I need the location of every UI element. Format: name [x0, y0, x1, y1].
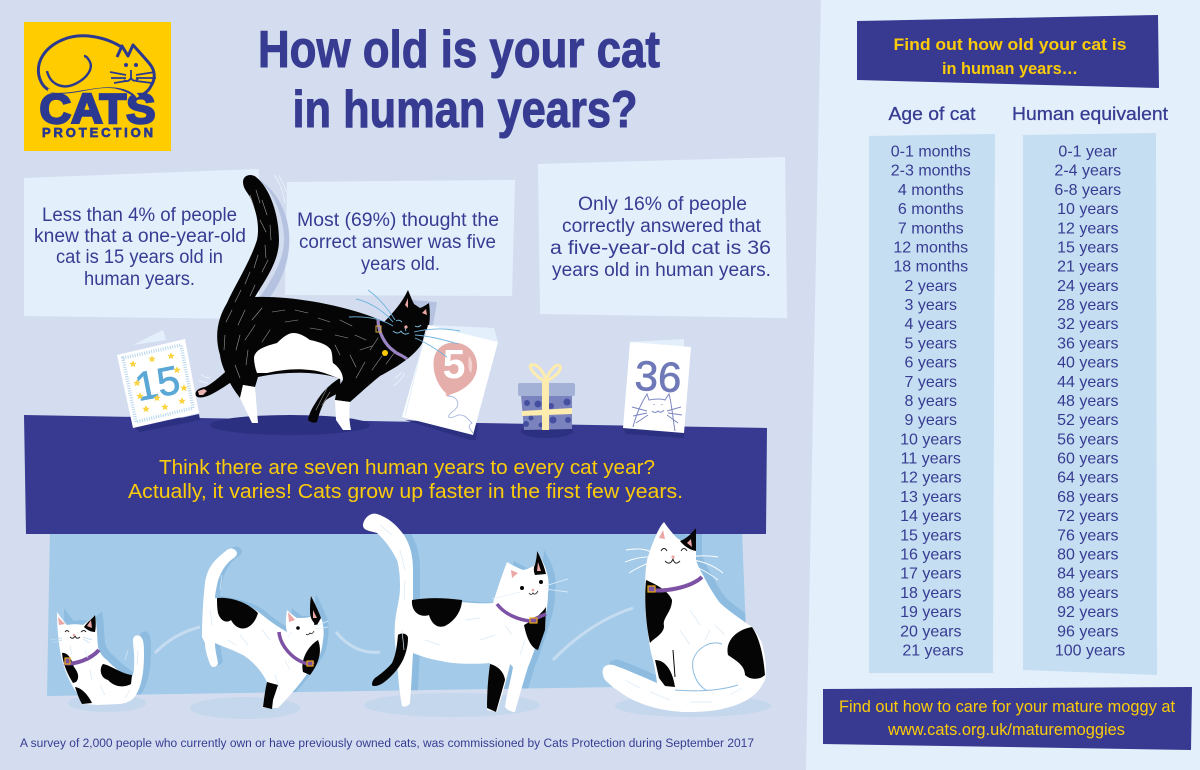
table column: human equivalent: 52 years [1057, 412, 1118, 429]
table column: human equivalent: 68 years [1057, 489, 1118, 506]
callout: mature moggy link: Find out how to care for your mature moggy at [839, 697, 1175, 716]
table column: age of cat: 4 months [898, 182, 964, 199]
table column: age of cat: 6 months [898, 201, 964, 218]
table column: age of cat: 21 years [902, 642, 964, 660]
logo: Cats Protection: PROTECTION [42, 125, 153, 140]
table column: age of cat: 14 years [900, 508, 961, 525]
table column: human equivalent: 0-1 year [1058, 144, 1118, 160]
table column: human equivalent: 92 years [1057, 604, 1118, 621]
table column: age of cat: 2 years [905, 278, 957, 295]
table column: human equivalent: 40 years [1057, 355, 1118, 372]
table column: human equivalent: 44 years [1057, 374, 1118, 391]
illustration: kitten 4 [603, 517, 772, 717]
callout: most 69%: correct answer was five [299, 232, 496, 253]
banner: think there are seven human years [24, 415, 767, 534]
table column: age of cat: 12 years [900, 470, 961, 487]
table heading: age of cat: Age of cat [888, 104, 976, 124]
table column: age of cat: 12 months [893, 240, 968, 256]
table column: human equivalent: 15 years [1057, 240, 1118, 256]
table column: human equivalent: 6-8 years [1054, 182, 1121, 199]
table column: human equivalent: 24 years [1057, 278, 1118, 295]
callout: less than 4%: human years. [84, 269, 195, 290]
title: How old is your cat [258, 21, 660, 79]
table column: age of cat: 17 years [900, 566, 961, 583]
illustration: card with 15: 15 [132, 358, 184, 410]
illustration: kitten 2 [190, 547, 329, 719]
title [258, 21, 660, 139]
callout: only 16%: years old in human years. [552, 260, 771, 281]
callout: less than 4%: knew that a one-year-old [34, 226, 246, 247]
table column: human equivalent: 96 years [1057, 623, 1118, 640]
callout: only 16%: correctly answered that [562, 216, 762, 237]
callout: less than 4% [24, 169, 259, 319]
table column: age of cat [869, 134, 995, 673]
table column: age of cat: 8 years [905, 393, 957, 410]
table column: human equivalent: 32 years [1057, 316, 1118, 333]
motion arcs between kittens [155, 608, 633, 660]
table column: human equivalent [1023, 133, 1157, 675]
panel: right header [857, 15, 1159, 88]
callout: mature moggy link: www.cats.org.uk/maturemoggies [887, 720, 1125, 739]
table column: human equivalent: 28 years [1057, 297, 1118, 314]
table column: human equivalent: 60 years [1057, 450, 1118, 468]
table column: age of cat: 4 years [905, 316, 957, 333]
illustration: card with 36: 36 [634, 352, 683, 401]
table column: age of cat: 13 years [900, 489, 961, 506]
callout: most 69%: years old. [361, 254, 440, 275]
table column: age of cat: 9 years [905, 412, 957, 429]
table column: age of cat: 18 years [900, 585, 961, 602]
table heading: human equivalent: Human equivalent [1012, 104, 1168, 124]
logo: Cats Protection: CATS [40, 85, 156, 132]
logo: Cats Protection [24, 22, 171, 151]
table column: human equivalent: 21 years [1057, 259, 1118, 276]
illustration: kitten 1 [50, 608, 151, 712]
table column: human equivalent: 100 years [1055, 642, 1125, 660]
callout: most 69% [285, 180, 515, 296]
table column: age of cat: 0-1 months [891, 144, 971, 160]
table column: human equivalent: 56 years [1057, 431, 1118, 448]
title: in human years? [292, 81, 638, 139]
table column: age of cat: 7 years [905, 374, 957, 391]
table column: human equivalent: 2-4 years [1054, 163, 1121, 180]
table column: age of cat: 10 years [900, 431, 961, 448]
table column: age of cat: 5 years [905, 335, 957, 352]
table column: age of cat: 2-3 months [891, 163, 971, 180]
callout: less than 4%: cat is 15 years old in [56, 247, 223, 268]
panel: blue backdrop for kittens [47, 530, 748, 696]
callout: most 69%: Most (69%) thought the [297, 210, 499, 231]
table column: age of cat: 16 years [900, 546, 961, 564]
table column: human equivalent: 10 years [1057, 201, 1118, 218]
panel: right header: in human years… [942, 59, 1078, 78]
callout: only 16% [538, 157, 787, 318]
callout: only 16%: Only 16% of people [578, 194, 747, 215]
callout: only 16%: a five-year-old cat is 36 [550, 238, 771, 259]
illustration: card with 15 [117, 330, 200, 432]
table column: age of cat: 6 years [905, 355, 957, 372]
table column: age of cat: 18 months [893, 259, 968, 276]
illustration: card with balloon 5 [402, 325, 498, 440]
table column: age of cat: 3 years [905, 297, 957, 314]
callout: mature moggy link [823, 687, 1192, 750]
illustration: kitten 3 [363, 513, 568, 717]
table column: human equivalent: 72 years [1057, 508, 1118, 525]
illustration: black cat [195, 175, 437, 430]
banner: think there are seven human years: Actually, it varies! Cats grow up faster in the first few years. [128, 481, 683, 503]
table column: human equivalent: 80 years [1057, 546, 1118, 564]
callout: less than 4%: Less than 4% of people [42, 205, 237, 226]
table column: age of cat: 7 months [898, 220, 964, 237]
illustration: card with 36 [623, 339, 691, 438]
whiskers over balloon card [414, 329, 460, 357]
table column: age of cat: 15 years [900, 527, 961, 544]
table column: human equivalent: 88 years [1057, 585, 1118, 602]
illustration: gift box [518, 365, 575, 438]
table column: age of cat: 11 years [901, 450, 961, 468]
illustration: card with balloon 5: 5 [443, 341, 465, 387]
panel: right header: Find out how old your cat is [894, 35, 1126, 54]
table column: human equivalent: 76 years [1057, 527, 1118, 544]
banner: think there are seven human years: Think there are seven human years to every cat year? [159, 457, 655, 479]
table column: age of cat: 19 years [900, 604, 961, 621]
panel: right column background [806, 0, 1200, 770]
table column: age of cat: 20 years [900, 623, 961, 640]
table column: human equivalent: 36 years [1057, 335, 1118, 352]
table column: human equivalent: 48 years [1057, 393, 1118, 410]
table column: human equivalent: 84 years [1057, 566, 1118, 583]
table column: human equivalent: 64 years [1057, 470, 1118, 487]
table column: human equivalent: 12 years [1057, 220, 1118, 237]
footnote: A survey of 2,000 people who currently own or have previously owned cats, was commissioned by Cats Protection during September 2017 [20, 738, 754, 750]
